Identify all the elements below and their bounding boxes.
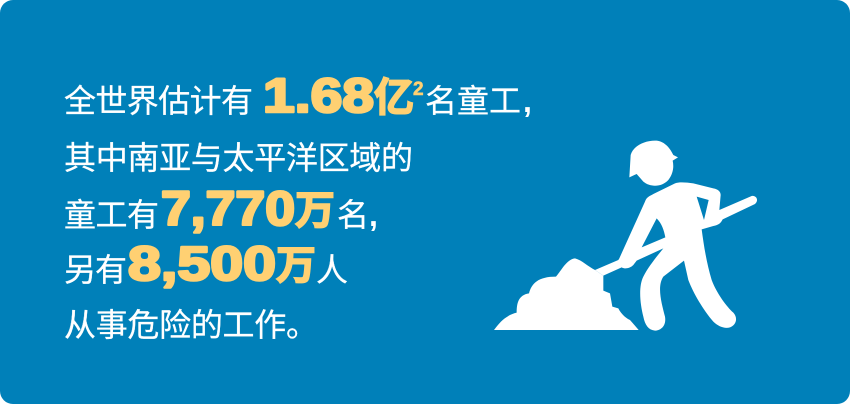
line 5: 从事危险的工作。 <box>64 307 318 343</box>
line 4 <box>64 233 348 291</box>
stat: 77.7 million: 7,770 <box>161 183 295 236</box>
stat: 168 million: 亿 <box>374 65 414 123</box>
line 1 <box>64 65 532 123</box>
stat: 85 million: 8,500 <box>128 238 276 291</box>
line 4: 另有 <box>64 252 127 288</box>
stat: 85 million: 万 <box>276 233 316 291</box>
text block: child labour statement <box>64 65 532 343</box>
line 3 <box>64 178 378 236</box>
line 1: 名童工 <box>425 83 521 119</box>
icon: worker shovelling <box>494 141 757 331</box>
line 1: , <box>523 83 532 119</box>
line 4: 人 <box>316 252 348 288</box>
stat: 77.7 million: 万 <box>295 178 335 236</box>
stat: 168 million <box>263 65 414 123</box>
helmet and head <box>629 141 678 186</box>
body and shovel handle <box>595 182 757 331</box>
footnote marker: 2 <box>413 79 424 100</box>
stat: 168 million: 1.68 <box>263 70 374 123</box>
stat: 85 million <box>128 233 316 291</box>
line 3: 名 <box>337 197 369 233</box>
line 1: 全世界估计有 <box>64 83 253 119</box>
stat: 77.7 million <box>161 178 335 236</box>
dirt pile <box>494 258 639 330</box>
line 2: 其中南亚与太平洋区域的 <box>64 140 413 176</box>
line 3: , <box>369 197 378 233</box>
line 3: 童工有 <box>64 197 159 233</box>
